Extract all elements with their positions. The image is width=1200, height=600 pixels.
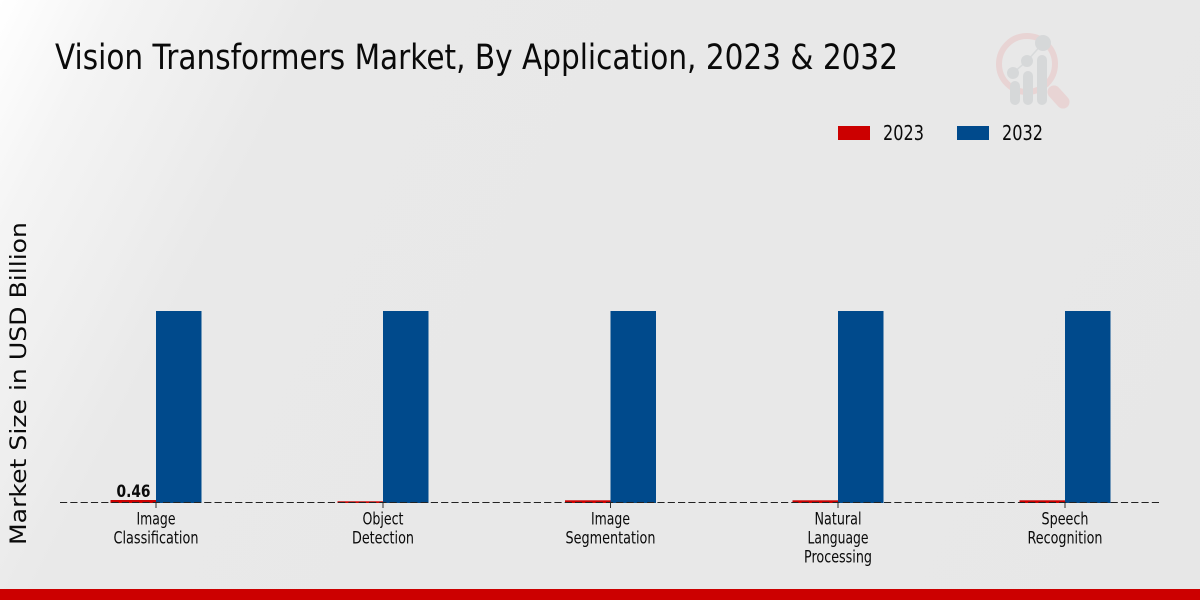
footer bar <box>0 589 1200 600</box>
label: Natural Language Processing: Language <box>808 528 868 548</box>
legend label 2023: 2023 <box>883 121 924 145</box>
bars 2032 <box>156 311 1110 503</box>
label: Speech Recognition: Speech <box>1042 510 1088 528</box>
legend label 2032: 2032 <box>1002 121 1043 145</box>
bars 2023 <box>110 500 1065 503</box>
label: Image Classification: Image <box>136 510 176 528</box>
y axis title: Market Size in USD Billion <box>6 222 32 545</box>
label: Object Detection: Detection <box>352 528 414 548</box>
legend swatch 2023 <box>838 126 870 140</box>
title: Vision Transformers Market, By Application, 2023 & 2032 <box>55 38 898 78</box>
watermark logo <box>999 35 1063 105</box>
legend swatch 2032 <box>957 126 989 140</box>
label: Object Detection: Object <box>362 510 404 528</box>
label: Image Segmentation: Image <box>591 510 630 528</box>
label: Image Classification <box>114 510 198 548</box>
label: Image Segmentation: Segmentation <box>566 528 656 548</box>
label: Natural Language Processing: Natural <box>814 510 862 528</box>
value label: 0.46 <box>116 482 150 502</box>
label: Speech Recognition: Recognition <box>1028 528 1102 548</box>
label: Natural Language Processing <box>804 510 872 566</box>
ticks <box>156 503 1065 508</box>
bar chart <box>60 311 1160 508</box>
label: Image Segmentation <box>566 510 656 548</box>
label: Speech Recognition <box>1028 510 1102 548</box>
label: Image Classification: Classification <box>114 528 198 548</box>
baseline <box>60 502 1160 504</box>
label: Natural Language Processing: Processing <box>804 548 872 566</box>
label: Object Detection <box>352 510 414 548</box>
legend <box>838 121 1043 145</box>
category labels <box>114 510 1102 566</box>
